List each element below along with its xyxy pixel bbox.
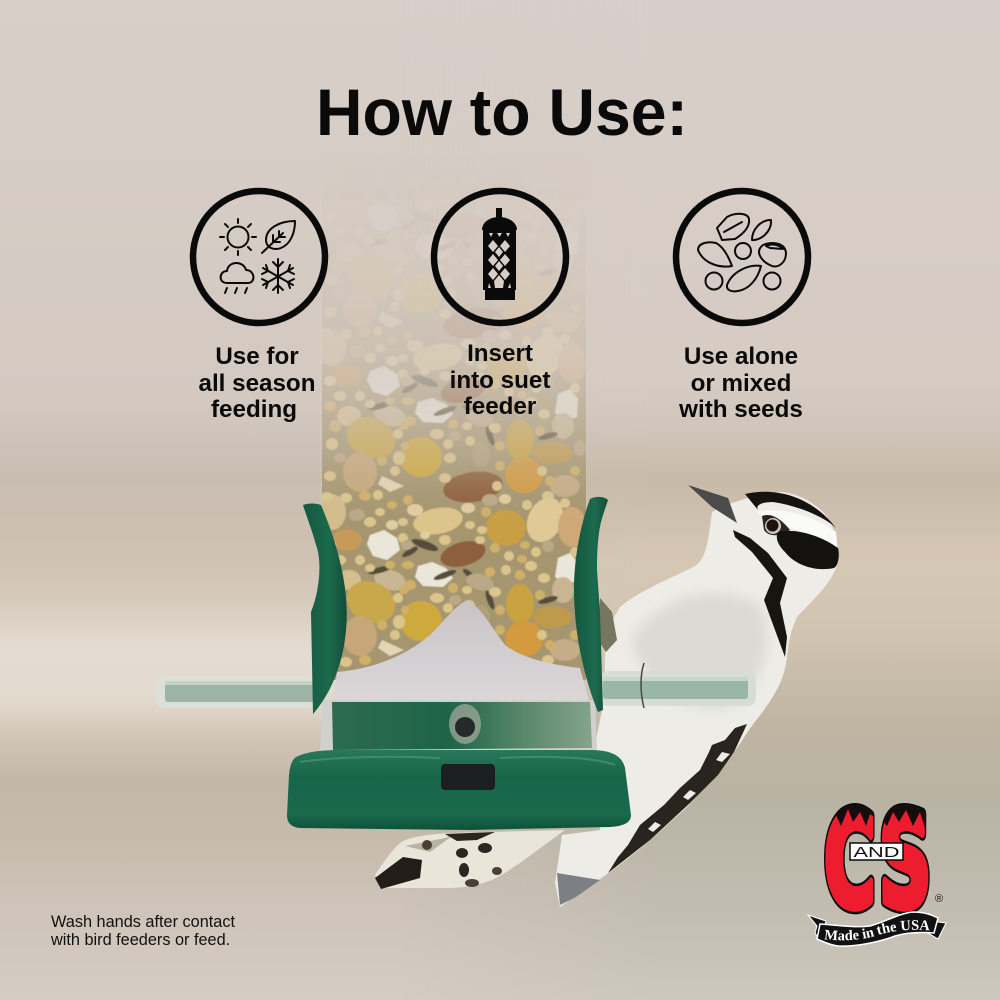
bird crown and face markings	[733, 492, 839, 657]
bird wing markings	[608, 724, 747, 873]
text: insert into suet feeder: Insert	[467, 340, 533, 367]
bird grey tail tip	[557, 873, 600, 905]
icon: seed mix	[676, 191, 808, 323]
text: use for all season feeding	[199, 343, 315, 423]
blurred background photo	[0, 411, 1000, 1000]
right green wing guard	[574, 497, 608, 712]
text: insert into suet feeder: into suet	[450, 367, 550, 394]
logo: C and S: C	[824, 785, 876, 937]
left perch	[156, 676, 316, 708]
text: use alone or mixed with seeds	[678, 343, 803, 423]
feeder tube with seed mix	[322, 244, 586, 680]
woodpecker	[375, 485, 839, 907]
icon: rain cloud	[221, 263, 253, 293]
logo: AND box	[850, 843, 903, 861]
footnote: Wash hands after contact	[51, 913, 235, 931]
bird tail feathers	[375, 830, 565, 889]
text: insert into suet feeder: feeder	[464, 393, 537, 420]
text: use alone or mixed with seeds: or mixed	[691, 370, 791, 397]
logo: made in the USA ribbon	[806, 911, 947, 947]
logo: made in the USA ribbon: Made in the USA	[824, 920, 930, 940]
text: use alone or mixed with seeds: Use alone	[684, 343, 798, 370]
text: use for all season feeding: all season	[199, 370, 315, 397]
feeder green band	[320, 700, 597, 752]
right perch	[600, 663, 756, 708]
left green wing guard	[303, 504, 347, 714]
text: use for all season feeding: Use for	[215, 343, 299, 370]
icon: leaf	[262, 221, 295, 253]
text: use alone or mixed with seeds: with seeds	[678, 396, 803, 423]
icon: sun	[220, 219, 256, 255]
logo: C and S	[824, 803, 943, 914]
bird foot	[598, 598, 617, 652]
footnote	[50, 913, 235, 949]
title: How to Use:	[316, 76, 688, 149]
feeder base	[287, 750, 631, 830]
logo: C and S: ®	[935, 893, 943, 905]
bird body	[555, 492, 837, 907]
logo: AND box: AND	[854, 844, 900, 861]
logo: C and S: C	[824, 785, 876, 937]
logo: C and S: S	[879, 785, 931, 937]
icon: all seasons	[193, 191, 325, 323]
feeder shield	[332, 600, 590, 705]
icon: snowflake	[262, 259, 294, 293]
logo: C and S: S	[879, 785, 931, 937]
icon: suet feeder	[434, 191, 566, 323]
logo: flame texture	[836, 806, 925, 828]
bird beak	[688, 485, 737, 523]
text: insert into suet feeder	[450, 340, 550, 420]
text: use for all season feeding: feeding	[211, 396, 297, 423]
footnote: with bird feeders or feed.	[50, 931, 230, 949]
